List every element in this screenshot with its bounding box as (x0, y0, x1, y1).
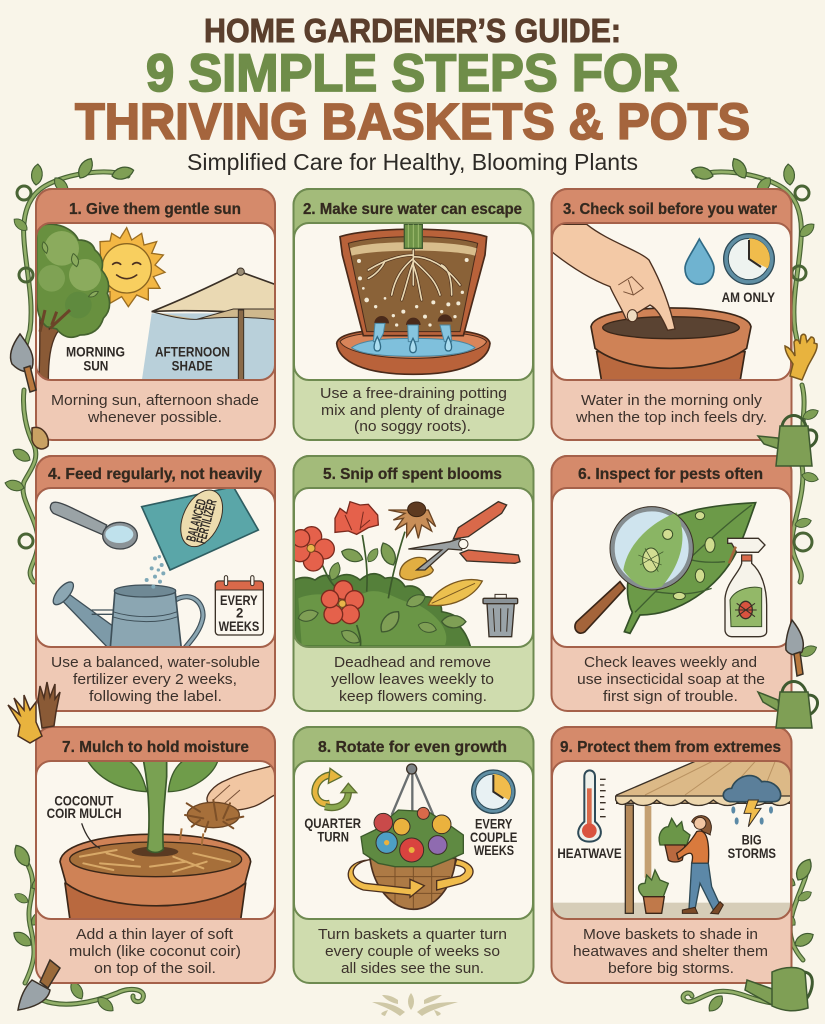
label: afternoon shade: SHADE (172, 359, 213, 374)
illustration 5 (290, 502, 520, 652)
caption 4 (51, 654, 260, 705)
label: quarter turn: TURN (317, 829, 349, 844)
panel 2: drainage (294, 189, 534, 440)
caption 1 (51, 392, 259, 426)
label: coconut coir mulch: COCONUT (54, 793, 114, 808)
right vines (683, 156, 820, 1014)
heading 2: 2. Make sure water can escape (303, 201, 522, 218)
illustration 9 (552, 761, 792, 921)
icon: watering can right middle (758, 682, 818, 728)
illustration 2 (337, 224, 490, 374)
heading 1: 1. Give them gentle sun (69, 201, 241, 218)
illustration 7 (47, 759, 275, 920)
label: quarter turn (304, 818, 361, 842)
left vines (4, 156, 143, 1014)
caption 3: when the top inch feels dry. (575, 409, 767, 426)
panel 6: pests (552, 456, 792, 711)
heading 4: 4. Feed regularly, not heavily (48, 466, 262, 483)
heading 8: 8. Rotate for even growth (318, 739, 507, 756)
label: am only: AM ONLY (722, 290, 775, 305)
caption 5: yellow leaves weekly to (331, 671, 494, 688)
title line 1: HOME GARDENER’S GUIDE: (204, 12, 621, 49)
illustration 8 (304, 764, 517, 909)
label: big storms: STORMS (728, 846, 776, 861)
caption 6 (577, 654, 765, 705)
panel 9: extremes (552, 727, 792, 983)
caption 8: all sides see the sun. (341, 960, 484, 977)
label: every couple weeks: WEEKS (474, 843, 514, 858)
label: every 2 weeks (218, 596, 259, 631)
caption 9: before big storms. (608, 960, 734, 977)
label: afternoon shade (155, 347, 230, 370)
label: coconut coir mulch: COIR MULCH (47, 806, 122, 821)
illustration 3 (552, 224, 775, 382)
caption 6: use insecticidal soap at the (577, 671, 765, 688)
caption 2: Use a free-draining potting (320, 385, 507, 402)
label: every 2 weeks: 2 (236, 606, 244, 621)
label: every 2 weeks: WEEKS (219, 619, 259, 634)
illustration 6 (575, 503, 767, 637)
caption 9: Move baskets to shade in (583, 926, 758, 943)
panel 1: gentle sun (36, 189, 277, 440)
panel 4: feed (36, 456, 275, 711)
label: heatwave: HEATWAVE (557, 846, 622, 861)
footer ornament (372, 993, 458, 1016)
heading 9: 9. Protect them from extremes (560, 739, 781, 756)
caption 1: Morning sun, afternoon shade (51, 392, 259, 409)
illustration 4: BALANCED (183, 497, 209, 543)
title line 3: THRIVING BASKETS & POTS (75, 93, 750, 150)
caption 5: Deadhead and remove (334, 654, 491, 671)
caption 4: Use a balanced, water-soluble (51, 654, 260, 671)
label: quarter turn: QUARTER (304, 816, 361, 831)
caption 7: Add a thin layer of soft (76, 926, 234, 943)
icon: shell (32, 427, 48, 449)
caption 9 (573, 926, 768, 977)
icon: yellow glove upper right (785, 334, 817, 380)
label: morning sun (66, 347, 124, 370)
label: coconut coir mulch (47, 796, 121, 818)
panel 8: rotate (294, 727, 534, 983)
label: every couple weeks (470, 819, 517, 855)
label: morning sun: MORNING (66, 344, 125, 359)
heading 6: 6. Inspect for pests often (578, 466, 763, 483)
icon: watering can bottom right (745, 968, 812, 1011)
caption 9: heatwaves and shelter them (573, 943, 768, 960)
panel 3: check soil (552, 189, 792, 440)
heading 5: 5. Snip off spent blooms (323, 466, 502, 483)
panel 7: mulch (36, 727, 275, 983)
heading 3: 3. Check soil before you water (563, 201, 777, 218)
icon: trowel upper left (10, 334, 36, 392)
icon: trowel right (786, 620, 803, 676)
caption 2 (320, 385, 507, 435)
title block (75, 12, 750, 175)
caption 1: whenever possible. (87, 409, 222, 426)
caption 8: every couple of weeks so (325, 943, 500, 960)
caption 2: (no soggy roots). (354, 418, 471, 435)
icon: watering can upper right (758, 416, 817, 466)
caption 5: keep flowers coming. (339, 688, 487, 705)
icon: garden gloves left (8, 682, 60, 743)
label: every 2 weeks: EVERY (220, 593, 258, 608)
caption 8: Turn baskets a quarter turn (318, 926, 507, 943)
caption 7: on top of the soil. (94, 960, 216, 977)
caption 7 (69, 926, 241, 977)
caption 7: mulch (like coconut coir) (69, 943, 241, 960)
caption 5 (331, 654, 494, 705)
heading 7: 7. Mulch to hold moisture (62, 739, 249, 756)
illustration 1 (37, 224, 277, 382)
caption 6: Check leaves weekly and (584, 654, 757, 671)
caption 6: first sign of trouble. (603, 688, 738, 705)
caption 4: following the label. (89, 688, 222, 705)
label: afternoon shade: AFTERNOON (155, 344, 230, 359)
label: big storms: BIG (742, 832, 762, 847)
caption 8 (318, 926, 507, 977)
caption 4: fertilizer every 2 weeks, (73, 671, 237, 688)
illustration 4 (50, 483, 263, 652)
panel 5: snip blooms (290, 456, 534, 711)
title line 2: 9 SIMPLE STEPS FOR (146, 44, 679, 103)
illustration 4: FERTILIZER (193, 498, 220, 545)
label: morning sun: SUN (83, 359, 108, 374)
icon: trowel bottom left (18, 960, 60, 1010)
caption 3 (575, 392, 767, 426)
subtitle: Simplified Care for Healthy, Blooming Plants (187, 149, 638, 175)
caption 2: mix and plenty of drainage (321, 402, 505, 419)
caption 3: Water in the morning only (581, 392, 763, 409)
label: big storms (728, 835, 776, 858)
label: every couple weeks: EVERY (475, 817, 512, 832)
label: every couple weeks: COUPLE (470, 830, 517, 845)
